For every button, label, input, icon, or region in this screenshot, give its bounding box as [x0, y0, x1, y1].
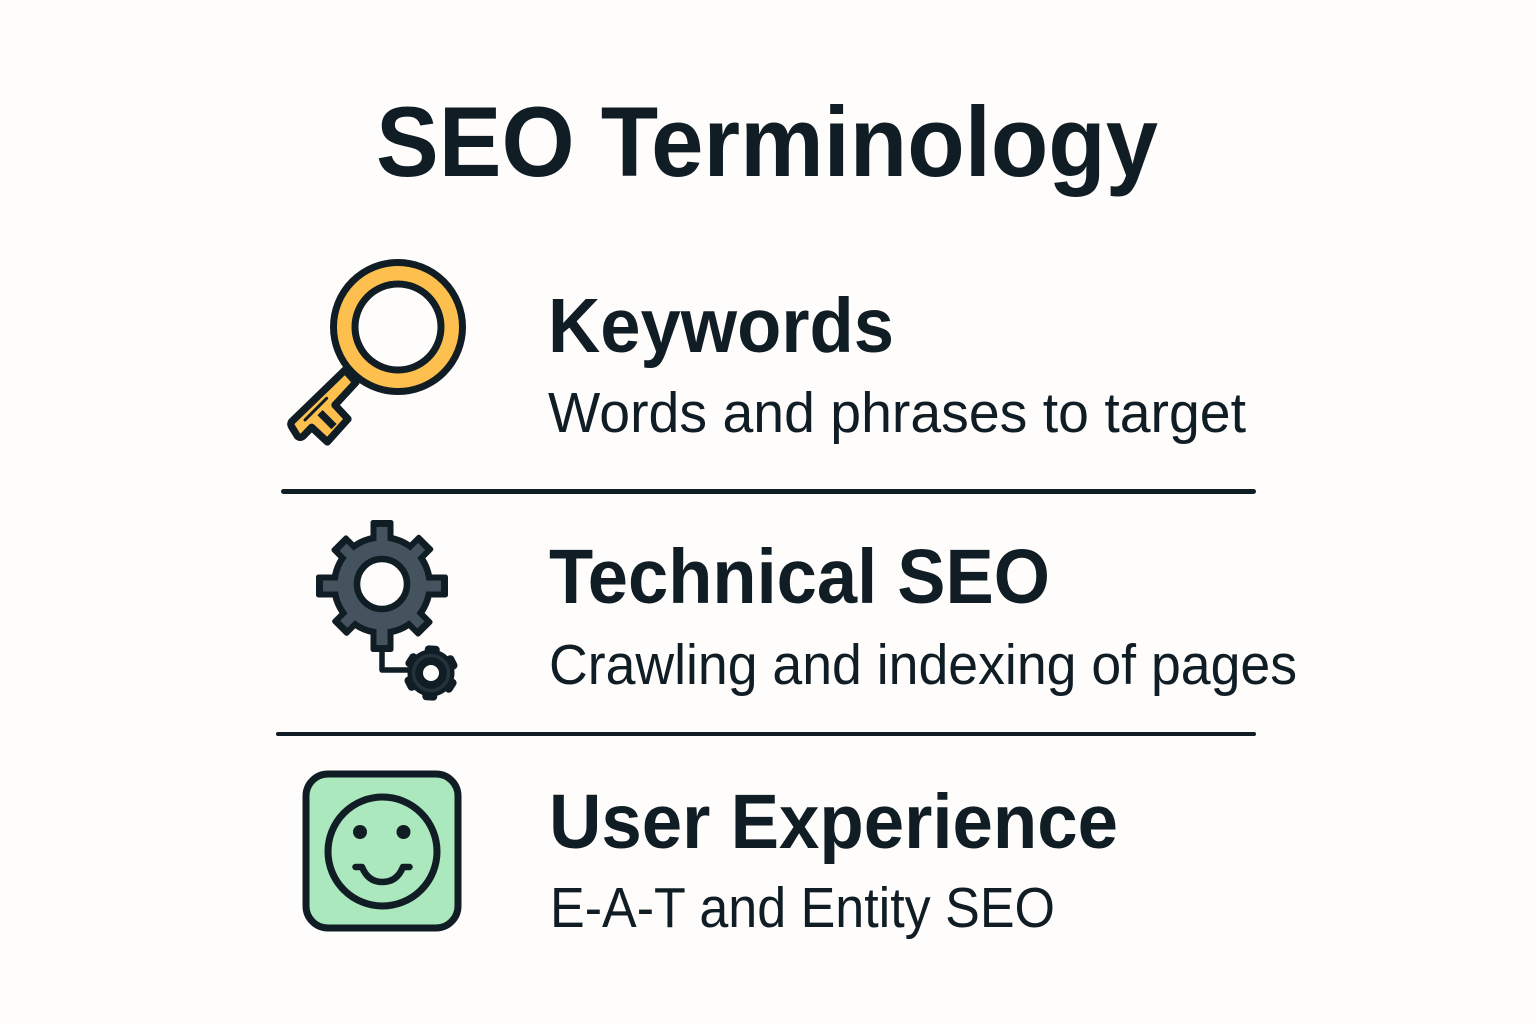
description: technical seo: Crawling and indexing of pages: [549, 633, 1297, 697]
description: keywords: Words and phrases to target: [548, 381, 1246, 445]
row: keywords: [291, 262, 1246, 445]
heading: technical seo: Technical SEO: [549, 534, 1050, 620]
heading: keywords: Keywords: [548, 283, 894, 369]
icon: gears: [316, 520, 459, 701]
icon: key: [291, 262, 462, 442]
row: user experience: [306, 774, 1118, 940]
row: technical seo: [316, 520, 1297, 701]
description: user experience: E-A-T and Entity SEO: [550, 876, 1055, 940]
large gear: [316, 520, 448, 652]
icon: smiley: [306, 774, 458, 928]
title: SEO Terminology: [376, 86, 1158, 197]
heading: user experience: User Experience: [549, 779, 1118, 865]
small gear: [403, 645, 459, 701]
